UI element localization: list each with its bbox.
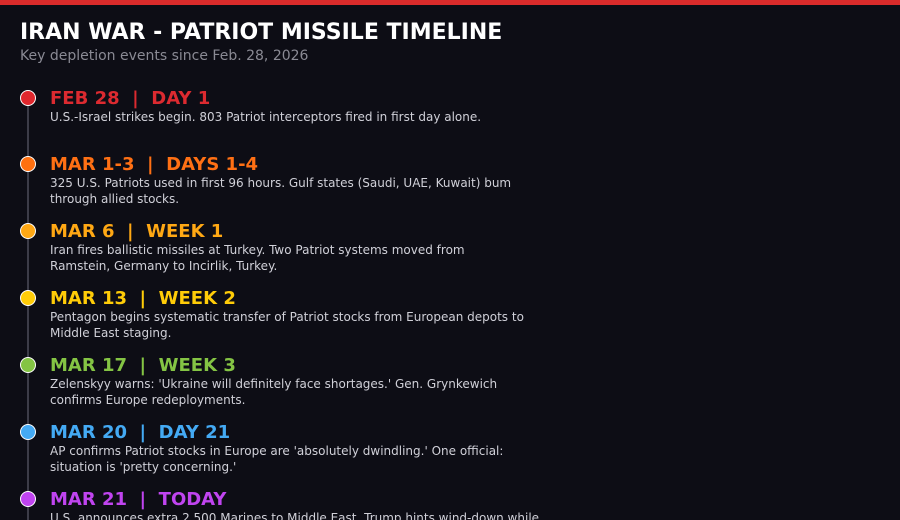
event: mar 21 [20,489,539,520]
event: mar 13: MAR 13 | WEEK 2 [50,288,236,309]
event: mar 17: MAR 17 | WEEK 3 [50,355,236,376]
title: IRAN WAR - PATRIOT MISSILE TIMELINE [20,20,502,45]
event: mar 1-3 [20,154,511,206]
event: mar 13: Pentagon begins systematic transfer of Patriot stocks from European depots to Middle East staging. [50,310,524,340]
top red bar [0,0,900,5]
event: mar 17 [20,355,497,407]
event: mar 20: AP confirms Patriot stocks in Europe are 'absolutely dwindling.' One official: situation is 'pretty concerning.' [50,444,503,474]
event: mar 20 [20,422,503,474]
event: mar 20: MAR 20 | DAY 21 [50,422,230,443]
event: mar 13 [20,288,524,340]
timeline line [27,98,29,520]
event: feb 28: U.S.-Israel strikes begin. 803 Patriot interceptors fired in first day alone. [50,110,481,124]
event: mar 1-3: 325 U.S. Patriots used in first 96 hours. Gulf states (Saudi, UAE, Kuwait) bum through allied stocks. [50,176,511,206]
event: feb 28: FEB 28 | DAY 1 [50,88,210,109]
event: mar 6: Iran fires ballistic missiles at Turkey. Two Patriot systems moved from Ramstein, Germany to Incirlik, Turkey. [50,243,465,273]
event: mar 6 [20,221,465,273]
subtitle: Key depletion events since Feb. 28, 2026 [20,48,308,64]
event: mar 6: MAR 6 | WEEK 1 [50,221,223,242]
event: mar 1-3: MAR 1-3 | DAYS 1-4 [50,154,258,175]
event: mar 21: MAR 21 | TODAY [50,489,226,510]
event: feb 28 [20,88,481,124]
event: mar 17: Zelenskyy warns: 'Ukraine will definitely face shortages.' Gen. Grynkewich confirms Europe redeployments. [50,377,497,407]
